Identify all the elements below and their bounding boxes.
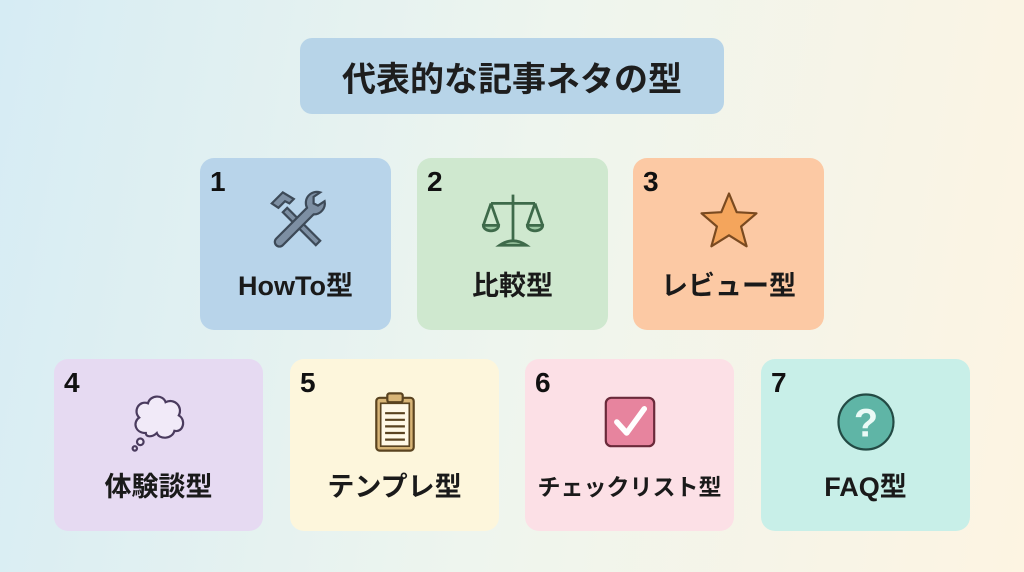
card 1 HowTo: HowTo型 — [238, 271, 353, 301]
card 4 experience: 体験談型 — [104, 472, 212, 502]
card 3 review — [633, 158, 824, 330]
card 7 FAQ: FAQ型 — [824, 472, 907, 502]
card 6 checklist: 6 — [535, 367, 551, 398]
card 4 experience — [54, 359, 263, 531]
icon: checkbox — [604, 396, 656, 448]
icon: tools — [270, 190, 326, 248]
card 7 FAQ — [761, 359, 970, 531]
card 1 HowTo: 1 — [210, 166, 226, 197]
card 6 checklist: チェックリスト型 — [538, 474, 722, 500]
card 3 review: 3 — [643, 166, 659, 197]
icon: thought cloud — [132, 396, 184, 452]
icon: question: ? — [853, 401, 878, 445]
title — [300, 38, 724, 114]
card 5 template: 5 — [300, 367, 316, 398]
icon: scale — [482, 194, 544, 247]
card 1 HowTo — [200, 158, 391, 330]
title: 代表的な記事ネタの型 — [342, 60, 682, 98]
card 7 FAQ: 7 — [771, 367, 787, 398]
card 2 compare — [417, 158, 608, 330]
card 2 compare: 2 — [427, 166, 443, 197]
icon: question — [837, 393, 895, 451]
card 4 experience: 4 — [64, 367, 80, 398]
card 2 compare: 比較型 — [472, 271, 553, 301]
card 3 review: レビュー型 — [661, 271, 796, 301]
card 5 template: テンプレ型 — [327, 472, 462, 502]
icon: clipboard — [375, 392, 415, 452]
card 6 checklist — [525, 359, 734, 531]
icon: star — [700, 192, 758, 248]
card 5 template — [290, 359, 499, 531]
